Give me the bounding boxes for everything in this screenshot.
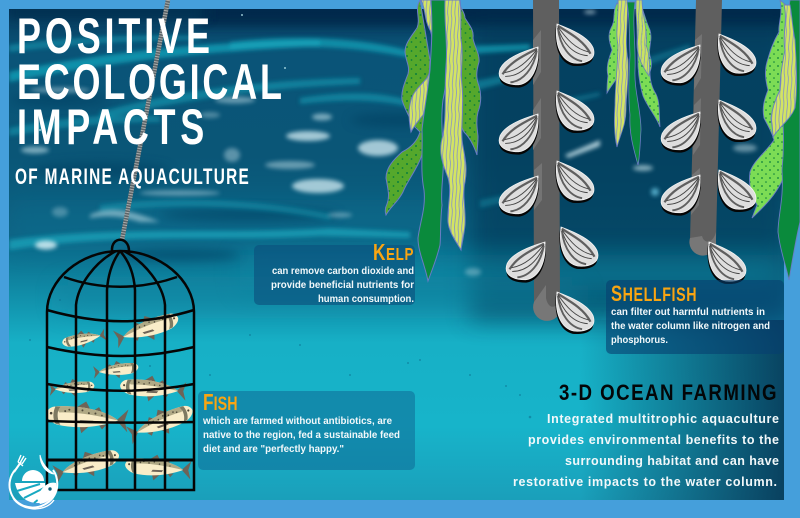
kelp cluster three [749,0,800,280]
text: shellfish description: phosphorus. [611,334,668,346]
text: shellfish description: can filter out harmful nutrients in [611,306,765,318]
title [15,9,282,190]
text: 3-D farming description [513,412,779,489]
fish group [45,307,197,486]
text: fish description: which are farmed without antibiotics, are [202,415,392,427]
rope two with mussels [660,0,756,284]
rope holding the cage [122,0,168,240]
heading: fish: FISH [203,391,238,416]
heading: kelp: KELP [373,241,414,266]
rope one with mussels [498,0,598,334]
text: kelp description: provide beneficial nutrients for [271,279,414,291]
text: kelp description [271,265,414,305]
title: OF MARINE AQUACULTURE [15,165,249,190]
panel: shellfish [606,280,784,354]
logo [9,455,57,509]
title: IMPACTS [17,100,204,155]
title: POSITIVE [17,9,210,64]
text: 3-D farming description: Integrated multitrophic aquaculture [547,412,779,426]
text: kelp description: can remove carbon dioxide and [272,265,414,277]
text: fish description [202,415,400,455]
text: 3-D farming description: restorative impacts to the water column. [513,475,777,489]
text: 3-D farming description: surrounding habitat and can have [565,454,779,468]
heading: 3-D ocean farming: 3-D OCEAN FARMING [559,382,777,405]
heading: shellfish: SHELLFISH [611,282,697,307]
panel: fish [198,391,415,470]
title: ECOLOGICAL [17,55,282,110]
text: fish description: native to the region, fed a sustainable feed [203,429,400,441]
text: shellfish description: the water column like nitrogen and [611,320,770,332]
text: kelp description: human consumption. [318,293,414,305]
text: fish description: diet and are "perfectly happy." [203,443,344,455]
kelp cluster one [385,0,481,281]
text: 3-D farming description: provides environmental benefits to the [528,433,779,447]
text: shellfish description [611,306,770,346]
panel: kelp [254,241,415,305]
kelp cluster two [607,0,660,165]
fish cage [47,240,194,490]
